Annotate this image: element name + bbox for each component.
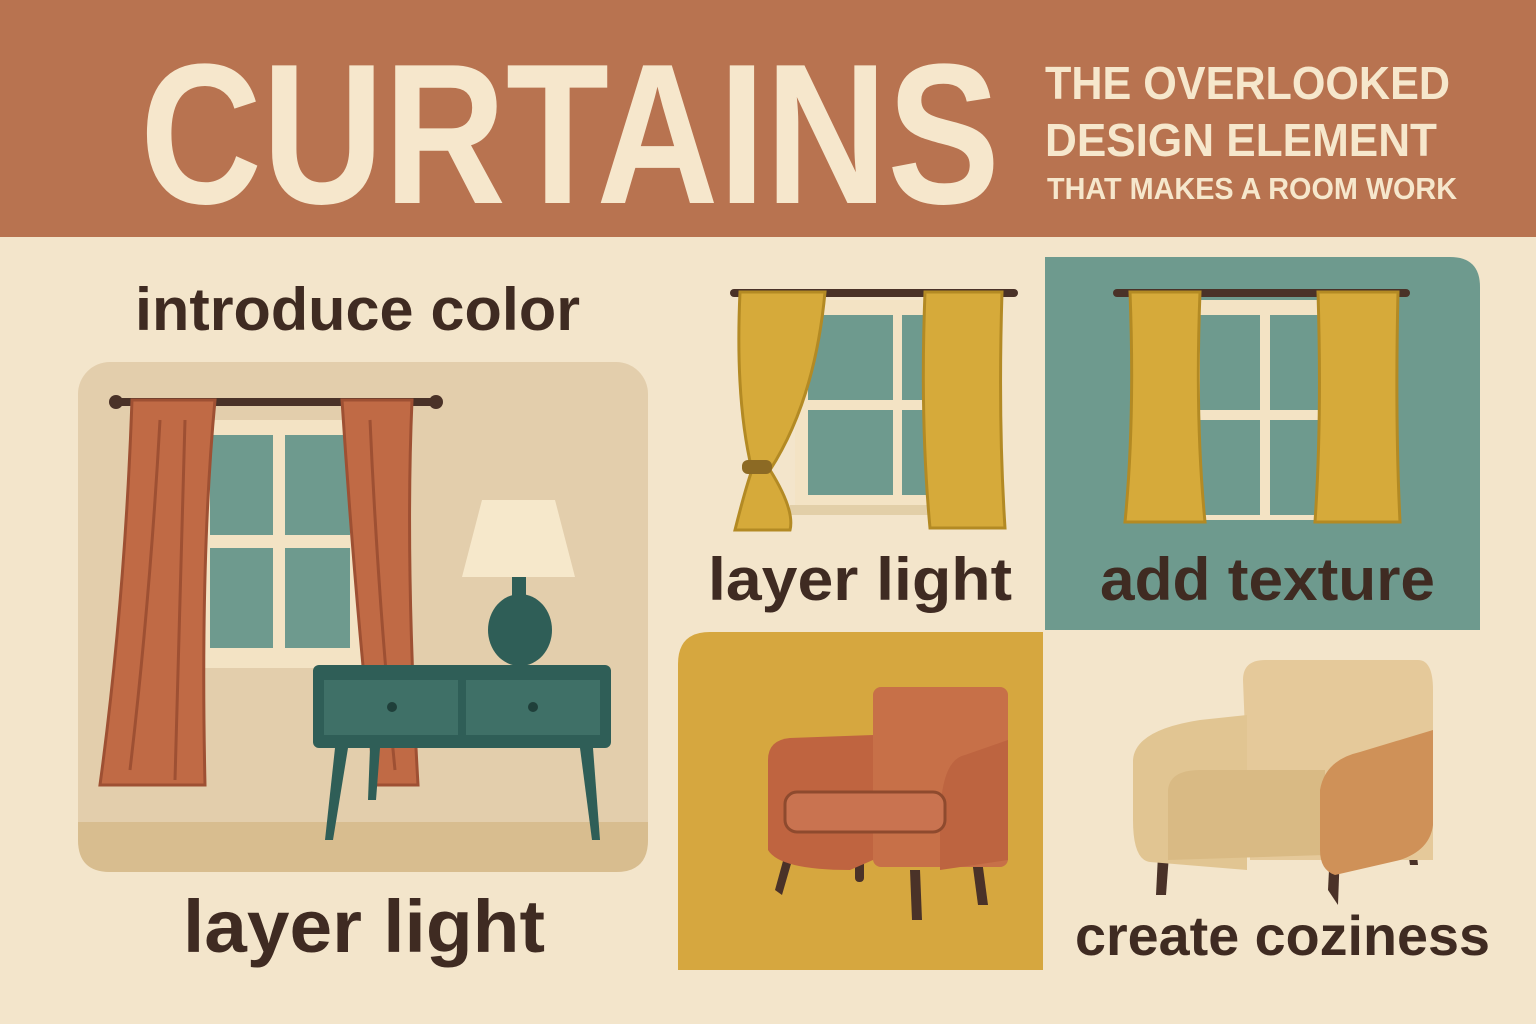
panel: window with tied curtain (730, 289, 1018, 530)
subtitle: THE OVERLOOKED (1045, 57, 1450, 109)
panel: living room scene (78, 362, 648, 872)
caption: add texture: add texture (1100, 546, 1435, 613)
subtitle: THAT MAKES A ROOM WORK (1047, 171, 1458, 206)
panel: add texture (1045, 257, 1480, 630)
panel: beige chair (1133, 660, 1433, 905)
window (195, 420, 365, 668)
panel: mustard chair (678, 632, 1043, 970)
title: CURTAINS (140, 23, 1000, 246)
subtitle: DESIGN ELEMENT (1045, 114, 1437, 166)
header band (0, 0, 1536, 246)
caption: layer light (middle): layer light (708, 546, 1012, 613)
curtains (100, 400, 418, 785)
caption: layer light: layer light (183, 885, 545, 968)
chair legs (775, 850, 988, 920)
heading: introduce color: introduce color (135, 276, 580, 343)
table (313, 665, 611, 840)
caption: create coziness: create coziness (1075, 904, 1490, 967)
curtain rod (109, 395, 443, 409)
lamp (462, 500, 575, 666)
subtitle (1045, 57, 1458, 206)
